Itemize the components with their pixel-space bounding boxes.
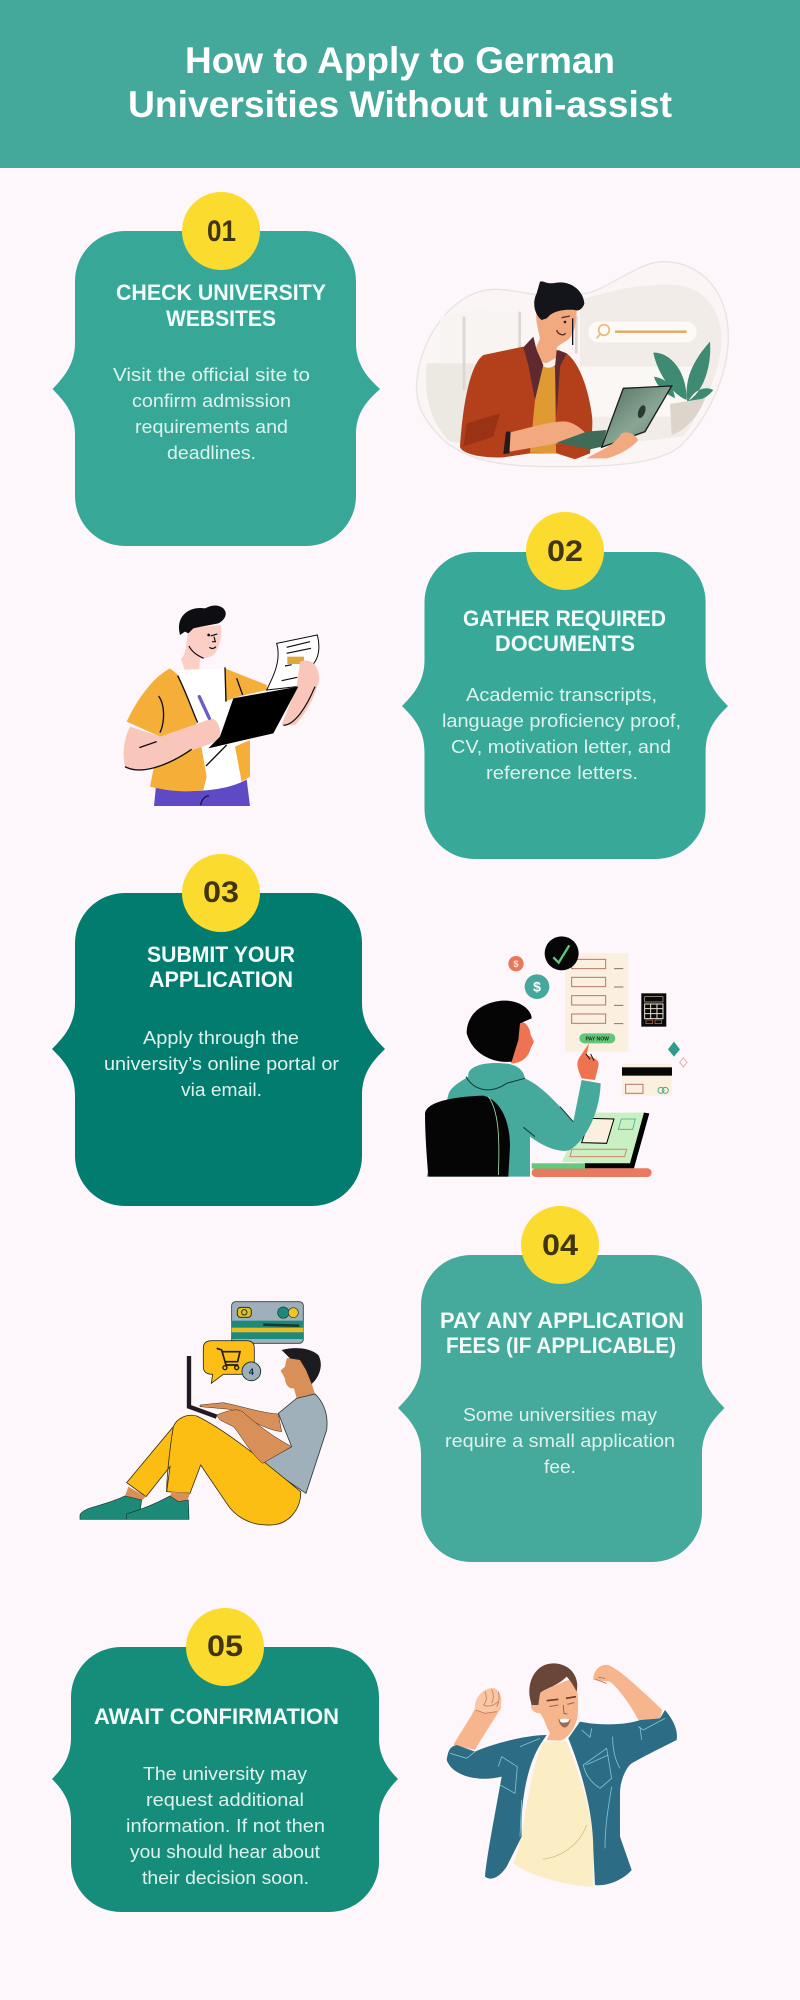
- step 2 heading: GATHER REQUIRED: [463, 606, 666, 631]
- step 2 heading: DOCUMENTS: [495, 631, 635, 656]
- number badge 01: [182, 192, 260, 270]
- step 5 heading: AWAIT CONFIRMATION: [94, 1704, 339, 1729]
- step 4 heading: PAY ANY APPLICATION: [440, 1308, 684, 1333]
- number badge 02: 02: [547, 535, 583, 568]
- step 2 body text: language proficiency proof,: [442, 710, 681, 731]
- illustration: man with laptop and search bar: [416, 262, 728, 467]
- step 3 body text: university’s online portal or: [104, 1053, 339, 1074]
- number badge 03: [182, 854, 260, 932]
- illustration: seated man shopping on laptop: 4: [249, 1367, 255, 1377]
- step 5 body text: their decision soon.: [142, 1867, 309, 1888]
- step 4 body text: [445, 1404, 675, 1477]
- illustration: man reading a document with tablet: [124, 605, 319, 806]
- step 1 body text: Visit the official site to: [113, 364, 310, 385]
- illustration: person paying online at desk: PAY NOW: [586, 1036, 610, 1042]
- step 2 body text: Academic transcripts,: [466, 684, 657, 705]
- number badge 03: 03: [203, 876, 239, 909]
- illustration: person paying online at desk: [425, 936, 687, 1177]
- step 4 heading: FEES (IF APPLICABLE): [446, 1333, 676, 1358]
- number badge 01: 01: [207, 215, 236, 248]
- title: How to Apply to German: [185, 40, 615, 81]
- panel shape: [52, 231, 380, 546]
- panel shape: [52, 893, 385, 1206]
- number badge 05: 05: [207, 1630, 243, 1663]
- step 4 body text: require a small application: [445, 1430, 675, 1451]
- number badge 02: [526, 512, 604, 590]
- illustration: person paying online at desk: $: [513, 959, 519, 969]
- step 3 panel: submit your application: [52, 854, 385, 1206]
- illustration: person paying online at desk: $: [533, 979, 541, 995]
- step 2 panel: gather required documents: [402, 512, 728, 859]
- step 2 body text: reference letters.: [486, 762, 638, 783]
- number badge 04: 04: [542, 1229, 578, 1262]
- step 1 heading: CHECK UNIVERSITY: [116, 280, 326, 305]
- step 5 body text: you should hear about: [130, 1841, 320, 1862]
- step 5 body text: The university may: [143, 1763, 308, 1784]
- step 3 heading: SUBMIT YOUR: [147, 942, 295, 967]
- number badge 05: [186, 1608, 264, 1686]
- step 1 heading: [116, 280, 326, 331]
- number badge 04: [521, 1206, 599, 1284]
- step 5 body text: request additional: [146, 1789, 304, 1810]
- step 1 body text: confirm admission: [132, 390, 291, 411]
- step 3 heading: APPLICATION: [149, 967, 293, 992]
- step 3 heading: [147, 942, 295, 992]
- title: [128, 40, 672, 125]
- illustration: celebrating man: [447, 1663, 677, 1887]
- panel shape: [402, 552, 728, 859]
- step 2 heading: [463, 606, 666, 656]
- step 4 panel: pay any application fees: [398, 1206, 724, 1562]
- step 1 heading: WEBSITES: [166, 306, 276, 331]
- step 4 body text: Some universities may: [463, 1404, 658, 1425]
- illustration: seated man shopping on laptop: [80, 1302, 327, 1525]
- step 2 body text: [442, 684, 681, 783]
- step 4 heading: [440, 1308, 684, 1358]
- step 1 body text: requirements and: [135, 416, 288, 437]
- step 5 body text: information. If not then: [126, 1815, 325, 1836]
- step 3 body text: [104, 1027, 339, 1100]
- step 5 panel: await confirmation: [52, 1608, 398, 1912]
- step 2 body text: CV, motivation letter, and: [451, 736, 671, 757]
- title: Universities Without uni-assist: [128, 84, 672, 125]
- panel shape: [398, 1255, 724, 1562]
- step 1 body text: deadlines.: [167, 442, 256, 463]
- step 1 panel: check university websites: [52, 192, 380, 546]
- step 1 body text: [113, 364, 310, 463]
- step 3 body text: Apply through the: [143, 1027, 299, 1048]
- panel shape: [52, 1647, 398, 1912]
- header banner: [0, 0, 800, 168]
- step 3 body text: via email.: [181, 1079, 262, 1100]
- step 4 body text: fee.: [544, 1456, 576, 1477]
- step 5 body text: [126, 1763, 325, 1888]
